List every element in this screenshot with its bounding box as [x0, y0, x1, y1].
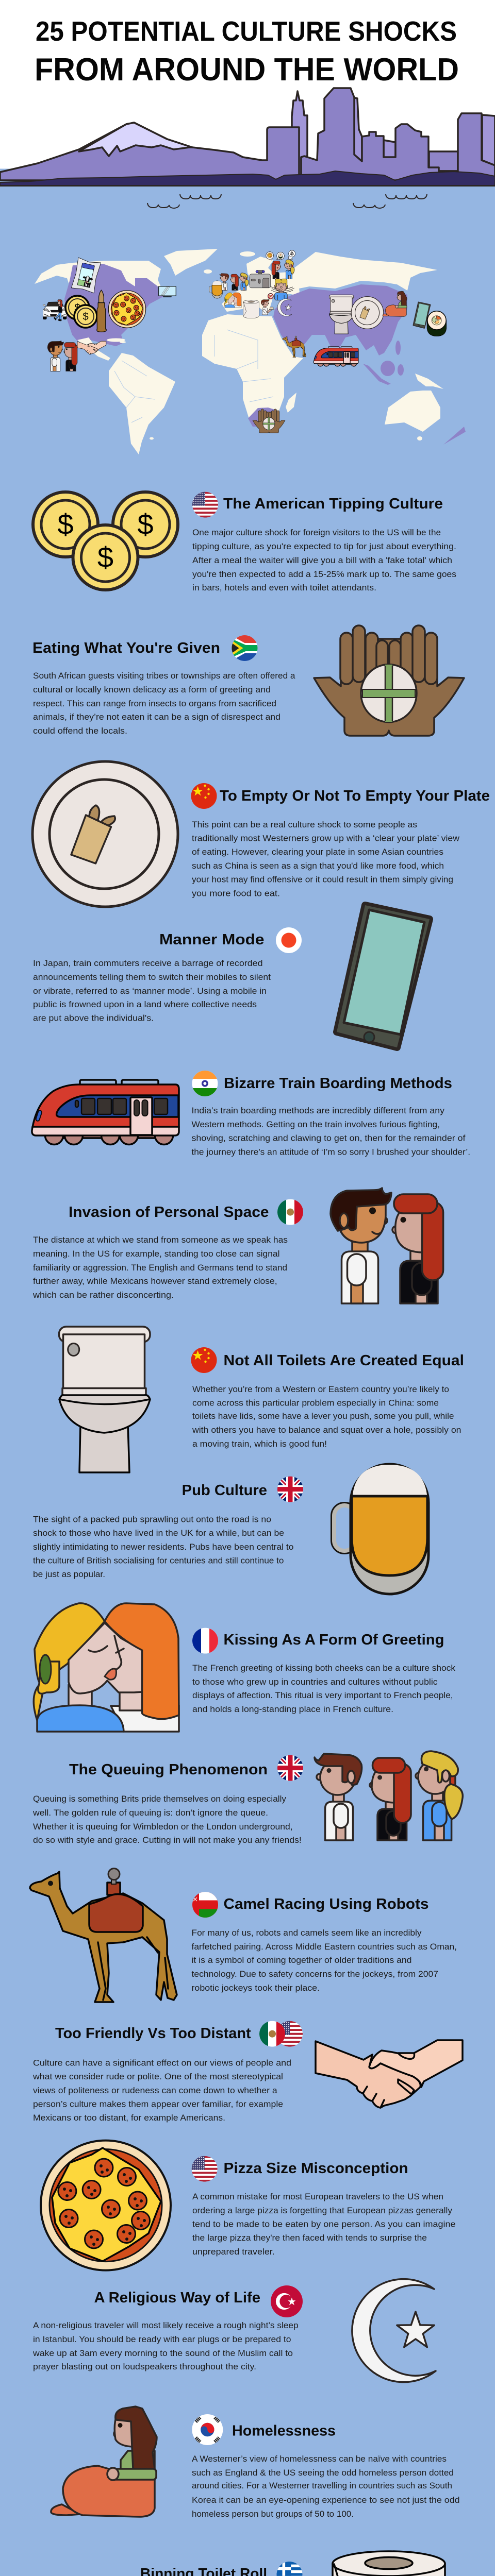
body text: the journey there's an attitude of ‘I’m so sorry I brushed your shoulder’.: [192, 1148, 470, 1157]
flag: USA: [192, 492, 218, 518]
body text: your host may find offensive or it could result in them simply giving: [192, 875, 453, 884]
panel: the queuing phenomenon: [32, 1751, 463, 1845]
icon: toilet: [59, 1327, 150, 1472]
mini icon: queue: [220, 273, 249, 290]
body text: come across this particular problem especially in China: some: [192, 1398, 439, 1408]
body text: [33, 959, 271, 1023]
mini icon: toilet: [329, 295, 354, 334]
body text: unprepared traveler.: [192, 2247, 275, 2257]
flag: South Africa: [232, 635, 258, 661]
body text: Whether you’re from a Western or Eastern country you’re likely to: [192, 1385, 449, 1394]
heading: Homelessness: [232, 2422, 336, 2439]
mini icon: coins: $: [82, 311, 89, 323]
body text: In Japan, train commuters receive a barrage of recorded: [33, 959, 263, 968]
panel: to empty or not to empty your plate: [32, 761, 490, 907]
mini icon: sushi roll: [427, 311, 447, 336]
heading: Invasion of Personal Space: [69, 1204, 269, 1221]
body text: [192, 2454, 460, 2519]
body text: of eating. However, clearing your plate in some Asian countries: [192, 848, 443, 857]
body text: meaning. In the US for example, standing too close can signal: [33, 1249, 279, 1259]
icon: two people close together: [331, 1188, 443, 1303]
mini icon: pizza: [108, 291, 146, 328]
body text: Korea it can be an eye-opening experience to see not just the odd: [192, 2496, 460, 2505]
body text: ordering a large pizza is forgetting that European pizzas generally: [192, 2206, 453, 2215]
body text: it is a symbol of coming together of older traditions and: [192, 1956, 411, 1965]
mini icon: car and pedestrian: [43, 300, 67, 321]
mini icon: camel: [283, 336, 306, 358]
panel: not all toilets are created equal: [59, 1327, 464, 1472]
body text: Culture can have a significant effect on our views of people and: [33, 2059, 291, 2068]
icon: coins: $: [97, 541, 113, 573]
panel: manner mode: [33, 905, 430, 1047]
flag: Greece: [276, 2562, 302, 2576]
mini icon: television: [158, 286, 176, 297]
body text: [192, 2192, 456, 2257]
body text: [32, 2059, 291, 2123]
body text: toilets have lids, some have a lever you push, some you pull, while: [192, 1412, 454, 1421]
body text: animals, if they’re not eaten it can be a sign of disrespect and: [33, 713, 280, 722]
flag: Turkey: [271, 2285, 303, 2317]
body text: displays of affection. This ritual is very important to French people,: [192, 1691, 453, 1700]
body text: cultural or locally known delicacy as a form of greeting and: [33, 685, 271, 694]
body text: wake up at 3am every morning to the sound of the Muslim call to: [32, 2349, 293, 2358]
panel: homelessness: [51, 2406, 459, 2519]
panel: pub culture: [33, 1464, 428, 1594]
heading: A Religious Way of Life: [94, 2290, 260, 2306]
body text: The distance at which we stand from someone as we speak has: [33, 1235, 288, 1245]
body text: Whether it is queuing for Wimbledon or the London underground,: [33, 1822, 293, 1832]
flag: China: [191, 1347, 217, 1373]
title: 25 POTENTIAL CULTURE SHOCKS: [36, 16, 457, 47]
body text: traditionally most Westerners grow up with a ‘clear your plate’ view: [192, 834, 459, 843]
mini icon: pay toilet: [250, 270, 271, 288]
mini icon: handshake: [77, 341, 106, 354]
body text: are put above the individual's.: [33, 1014, 154, 1023]
body text: [192, 1664, 456, 1714]
body text: technology. Due to safety concerns for the jockeys, from 2007: [192, 1970, 438, 1979]
flag: China: [191, 783, 217, 809]
body text: A Westerner’s view of homelessness can be naïve with countries: [192, 2454, 447, 2464]
heading: Pub Culture: [182, 1482, 267, 1499]
mini icon: phone: [414, 302, 430, 328]
world map: [35, 249, 466, 454]
body text: with others you have to balance and squat over a hole, possibly on: [192, 1426, 461, 1435]
panel: kissing as a form of greeting: [34, 1603, 456, 1732]
body text: which can be rather disconcerting.: [32, 1291, 174, 1300]
body text: tipping culture, as you're expected to tip for just about everything.: [192, 542, 456, 551]
body text: views of politeness or rudeness can come down to whether a: [33, 2086, 277, 2095]
icon: seated woman: [51, 2406, 157, 2517]
body text: well. The golden rule of queuing is: don’t ignore the queue.: [32, 1808, 268, 1818]
body text: shock to those who have lived in the UK for a while, but can be: [33, 1529, 284, 1538]
mini icon: plate: [351, 297, 384, 329]
icon: three people queuing: [315, 1751, 463, 1840]
mini icon: toilet roll: [243, 300, 259, 318]
flag: Mexico: [277, 1199, 303, 1225]
mini icon: coins: [65, 296, 97, 328]
heading: Kissing As A Form Of Greeting: [224, 1632, 444, 1648]
body text: [32, 1794, 302, 1845]
body text: prayer blasting out on loudspeakers throughout the city.: [33, 2362, 256, 2371]
icon: handshake: [316, 2040, 463, 2108]
body text: [192, 1928, 457, 1993]
heading: Camel Racing Using Robots: [224, 1896, 429, 1912]
mini icon: man shaking head: [271, 279, 294, 300]
heading: Not All Toilets Are Created Equal: [224, 1352, 464, 1369]
body text: around cities. For a Westerner travelling in countries such as South: [192, 2481, 452, 2490]
body text: tend to be made to be eaten by one person. As you can imagine: [192, 2219, 456, 2229]
panel: camel racing using robots: [30, 1869, 457, 2002]
flag: UK: [277, 1755, 303, 1781]
body text: A common mistake for most European travelers to the US when: [192, 2192, 443, 2201]
body text: respect. This can range from insects to organs from sacrificed: [33, 699, 276, 708]
icon: toilet roll: [333, 2551, 445, 2576]
body text: [32, 1235, 288, 1300]
mini icon: coins: $: [74, 302, 80, 314]
panel: pizza size misconception: [41, 2141, 456, 2270]
body text: [32, 2321, 299, 2371]
icon: train: [32, 1080, 179, 1145]
icon: two women kissing: [34, 1603, 179, 1732]
body text: do so with style and grace. Cutting in will not make you any friends!: [33, 1836, 302, 1845]
icon: crescent and star: [352, 2279, 436, 2382]
body text: The sight of a packed pub sprawling out onto the road is no: [33, 1515, 271, 1524]
body text: in Istanbul. You should be ready with ear plugs or be prepared to: [33, 2335, 291, 2344]
mini icon: homeless woman: [383, 291, 407, 316]
title: FROM AROUND THE WORLD: [35, 52, 459, 88]
body text: Mexicans or too distant, for example Americans.: [33, 2113, 225, 2123]
sea waves: [147, 194, 427, 208]
flag: USA: [192, 2156, 218, 2182]
body text: Queuing is something Brits pride themselves on doing especially: [33, 1794, 287, 1804]
body text: The French greeting of kissing both cheeks can be a culture shock: [192, 1664, 456, 1673]
mini icon: man with cake: [261, 293, 274, 315]
body text: [33, 1515, 293, 1579]
body text: person’s culture makes them appear over familiar, for example: [33, 2100, 283, 2109]
heading: Bizarre Train Boarding Methods: [224, 1075, 452, 1092]
heading: Eating What You're Given: [32, 640, 220, 656]
body text: [33, 671, 295, 736]
body text: For many of us, robots and camels seem like an incredibly: [192, 1928, 422, 1938]
flag: Oman: [192, 1892, 218, 1918]
mini icon: crescent: [277, 299, 292, 316]
mini icon: hands: [253, 409, 285, 433]
body text: slightly intimidating to newer residents. Pubs have been central to: [33, 1543, 293, 1552]
body text: further away, while Mexicans however stand extremely close,: [33, 1277, 277, 1286]
body text: to those who grew up in countries and cultures without public: [192, 1677, 438, 1687]
body text: robotic jockeys took their place.: [192, 1984, 320, 1993]
body text: This point can be a real culture shock to some people as: [192, 820, 417, 829]
body text: be just as popular.: [33, 1570, 105, 1579]
mini icon: milk bag: [71, 258, 101, 293]
heading: Manner Mode: [159, 931, 264, 948]
body text: homeless person but groups of 50 to 100.: [192, 2510, 354, 2519]
body text: what we consider rude or polite. One of the most stereotypical: [32, 2072, 283, 2081]
heading: The Queuing Phenomenon: [69, 1761, 268, 1778]
body text: announcements telling them to switch their mobiles to silent: [33, 973, 271, 982]
body text: or vibrate, referred to as ‘manner mode’. Using a mobile in: [33, 987, 267, 996]
mini icon: bullet: [97, 290, 106, 332]
panel: too friendly vs too distant: [32, 2021, 463, 2123]
icon: beer mug: [332, 1464, 428, 1594]
flag: Japan: [276, 927, 302, 953]
body text: a moving train, which is good fun!: [192, 1439, 327, 1449]
body text: farfetched pairing. Across Middle Eastern countries such as Oman,: [192, 1942, 457, 1952]
body text: A non-religious traveler will most likely receive a rough night’s sleep: [33, 2321, 299, 2330]
body text: South African guests visiting tribes or townships are often offered a: [33, 671, 295, 681]
body text: One major culture shock for foreign visitors to the US will be the: [192, 528, 441, 537]
panel: American tipping culture: [33, 492, 456, 592]
mini icon: train: [314, 347, 358, 366]
body text: and holds a long-standing place in French culture.: [192, 1705, 393, 1714]
body text: shoving, scratching and clawing to get on, then for the remainder of: [192, 1133, 466, 1143]
title: [35, 16, 459, 88]
body text: Western methods. Getting on the train involves furious fighting,: [192, 1120, 440, 1129]
body text: such as England & the US seeing the odd homeless person dotted: [192, 2468, 454, 2478]
icon: phone: [337, 905, 430, 1047]
icon: coins: $: [57, 508, 74, 540]
icon: pizza: [41, 2141, 171, 2270]
mini icon: kissing: [224, 293, 241, 308]
flag: India: [192, 1071, 218, 1096]
skyline with mountain and city: [0, 88, 495, 187]
body text: India’s train boarding methods are incredibly different from any: [192, 1106, 445, 1115]
flag: France: [192, 1628, 218, 1654]
icon: coins: $: [137, 508, 154, 540]
body text: [192, 1106, 470, 1157]
body text: [192, 1385, 461, 1449]
body text: in bars, hotels and even with toilet attendants.: [192, 583, 376, 592]
body text: [192, 820, 459, 899]
mini icon: two people: [47, 341, 77, 371]
icon: plate with food: [32, 761, 178, 907]
mini icon: talking people: [266, 250, 295, 279]
panel: eating what you're given: [32, 625, 464, 736]
body text: could offend the locals.: [33, 726, 127, 736]
panel: a religious way of life: [32, 2279, 436, 2382]
body text: the culture of British socialising for centuries and still continue to: [33, 1556, 284, 1565]
flag: UK: [277, 1477, 303, 1502]
heading: The American Tipping Culture: [223, 496, 443, 512]
icon: hands holding food: [314, 625, 464, 736]
body text: familiarity or aggression. The English and Germans tend to stand: [33, 1263, 287, 1273]
body text: After a meal the waiter will give you a bill with a 'fake total' which: [192, 556, 452, 565]
icon: coins: [33, 492, 178, 590]
body text: such as China is seen as a sign that you'd like more food, which: [192, 861, 444, 871]
body text: you more food to eat.: [192, 889, 280, 899]
body text: you're then expected to add a 15-25% mark up to. The same goes: [192, 570, 456, 579]
flag: USA: [277, 2021, 303, 2047]
icon: camel with robot jockey: [30, 1869, 177, 2002]
flag: Mexico: [259, 2021, 285, 2047]
flag: South Korea: [192, 2414, 223, 2445]
panel: binning toilet roll: [33, 2551, 445, 2576]
mini icon: beer: [209, 281, 222, 298]
heading: Too Friendly Vs Too Distant: [55, 2025, 251, 2042]
body text: [192, 528, 456, 592]
panel: bizarre train boarding methods: [32, 1071, 470, 1157]
panel: invasion of personal space: [32, 1188, 443, 1303]
body text: public is frowned upon in a land where collective needs: [33, 1000, 257, 1009]
heading: To Empty Or Not To Empty Your Plate: [220, 788, 490, 804]
heading: Pizza Size Misconception: [224, 2160, 408, 2177]
body text: the large pizza they're then faced with tends to surprise the: [192, 2233, 427, 2243]
